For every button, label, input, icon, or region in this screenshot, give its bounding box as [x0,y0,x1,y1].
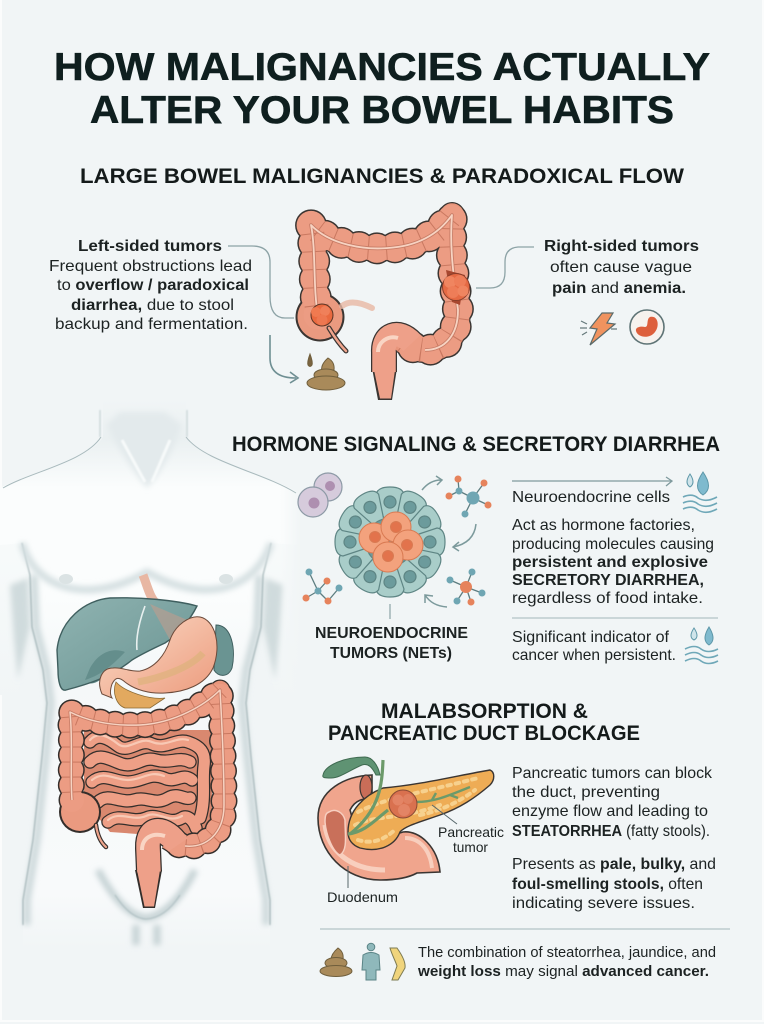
text: left-sided tumors: to overflow / paradoxical [57,277,249,294]
teal backing [340,492,440,592]
connector: left tumor label [228,246,294,318]
arms [0,530,300,695]
divider [320,928,730,930]
colon outline layer [296,215,458,400]
text: left-sided tumors: backup and fermentation. [55,316,248,333]
text: pancreatic tumors block: enzyme flow and leading to [512,803,708,820]
pancreas in abdomen [114,682,165,708]
label: pancreatic tumor [438,824,504,855]
icon: anemia circle [630,310,664,344]
liver lower lobe [82,671,104,683]
text: combination warning: weight loss may signal advanced cancer. [417,964,709,980]
text: right-sided tumors: pain and anemia. [552,280,686,297]
tick line [389,604,391,619]
illustration: colon [296,215,470,400]
pectoral shading [22,543,271,590]
duodenum openings [360,775,372,799]
appendix [329,328,346,351]
text: hormone factories: producing molecules causing [512,536,714,553]
pancreas [348,770,494,850]
molecule bottom right [446,568,486,606]
text: neuroendocrine cells: Neuroendocrine cells [512,489,670,506]
text: left-sided tumors [49,238,252,333]
arrow: neuroendocrine cells [512,477,672,486]
gallbladder [323,757,380,778]
right tumor [442,270,470,305]
text: significant indicator: Significant indicator of [512,629,670,646]
text: hormone factories: persistent and explosive [512,554,708,571]
pancreatic duct [416,787,470,802]
icon: pain lightning [580,313,617,345]
liver [57,598,197,690]
molecule top right [446,476,492,518]
leader lines [348,805,457,888]
arrow: to stool [270,335,298,383]
shoulder lines [3,437,296,493]
text: right-sided tumors: Right-sided tumors [544,238,699,255]
abdominal appendix [96,825,106,847]
connector: right tumor label [476,247,534,288]
duodenum [318,775,440,880]
label: pancreatic tumor: tumor [453,839,488,855]
label: pancreatic tumor: Pancreatic [438,824,504,840]
text: significant indicator: cancer when persistent. [512,647,676,664]
text: hormone factories: regardless of food intake. [512,590,703,607]
title: ALTER YOUR BOWEL HABITS [90,89,674,132]
abdominal colon [59,690,224,908]
label: neuroendocrine tumors: TUMORS (NETs) [330,645,452,662]
illustration: human torso [0,400,301,948]
heading: large bowel: LARGE BOWEL MALIGNANCIES & PARADOXICAL FLOW [80,165,684,188]
text: presents as [512,856,716,912]
orange tumor cells [359,512,423,572]
esophagus [143,575,156,603]
title [54,46,710,132]
cycle arrows [422,476,476,607]
text: left-sided tumors: Left-sided tumors [78,238,222,255]
spleen [214,625,233,675]
text: pancreatic tumors block [512,765,713,840]
illustration: neuroendocrine tumor cluster [298,473,492,619]
text: combination warning: The combination of steatorrhea, jaundice, and [418,945,716,961]
icon: drops and waves [683,472,717,512]
nipples [59,574,73,584]
divider [512,617,718,619]
heading: malabsorption: MALABSORPTION & [381,700,588,723]
torso edge shading [27,575,266,925]
small intestine [84,730,212,836]
groin shading [98,870,195,945]
text: pancreatic tumors block: STEATORRHEA (fatty stools). [512,823,710,840]
purple cells [298,473,342,517]
icon: stool small [320,948,352,976]
title: HOW MALIGNANCIES ACTUALLY [54,46,710,89]
text: significant indicator [512,629,676,664]
right fade [280,470,301,700]
text: hormone factories: Act as hormone factories, [512,517,695,534]
text: hormone factories: SECRETORY DIARRHEA, [512,572,704,589]
text: right-sided tumors: often cause vague [550,259,692,276]
bile duct [348,760,388,834]
tumor [389,790,417,818]
text: pancreatic tumors block: Pancreatic tumors can block [512,765,713,782]
text: pancreatic tumors block: the duct, preventing [512,784,660,801]
label: neuroendocrine tumors [315,625,468,662]
label: duodenum: Duodenum [327,889,398,905]
ileum stub [342,302,372,308]
abdominal colon fill [61,690,224,906]
left tumor [311,304,333,326]
stomach [100,617,217,698]
icon: jaundice leg [390,948,405,980]
icon: drops and waves small [685,627,718,664]
colon fill layer [298,215,458,398]
text: presents as: indicating severe issues. [512,895,695,912]
illustration: pancreas and duodenum [318,757,494,888]
teal cells [335,487,445,597]
text: combination warning [417,945,716,980]
text: right-sided tumors [544,238,699,297]
icon: stool [307,354,345,390]
stomach wedge over liver [150,604,192,640]
arm shading [10,578,283,680]
icon: person [362,943,380,980]
body fill [0,400,300,948]
heading: malabsorption: PANCREATIC DUCT BLOCKAGE [328,722,640,745]
neck lines [100,410,187,437]
heading: hormone signaling: HORMONE SIGNALING & SECRETORY DIARRHEA [232,433,720,456]
text: left-sided tumors: diarrhea, due to stool [71,297,234,314]
heading: malabsorption [328,700,640,745]
text: left-sided tumors: Frequent obstructions lead [49,258,252,275]
text: presents as: Presents as pale, bulky, and [512,856,716,873]
label: neuroendocrine tumors: NEUROENDOCRINE [315,625,468,642]
molecule bottom left [302,568,342,604]
text: hormone factories [512,517,714,607]
neck shading [106,412,182,488]
torso edge lines [22,543,271,925]
text: presents as: foul-smelling stools, often [512,876,703,893]
abdominal colon outline [59,690,224,908]
